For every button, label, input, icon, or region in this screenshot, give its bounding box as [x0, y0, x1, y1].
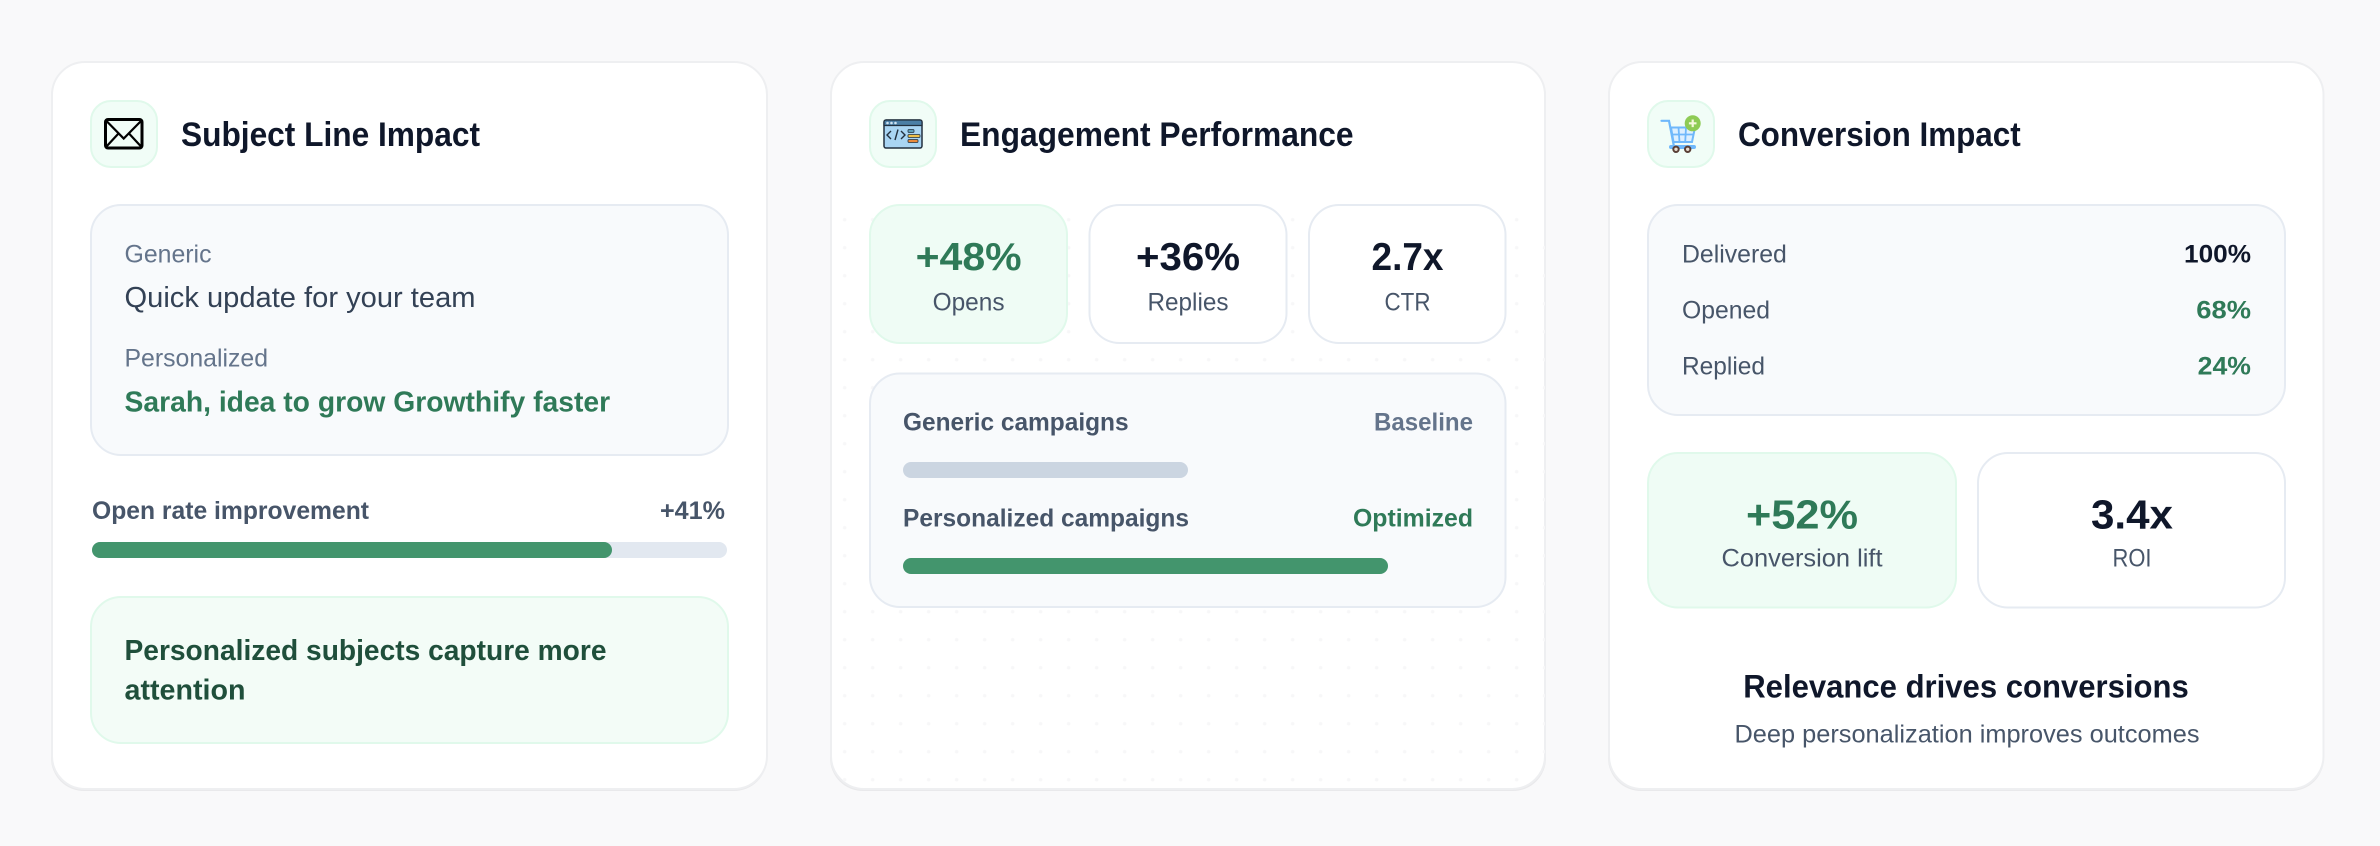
chart: campaign comparison — [870, 374, 1506, 607]
stat: replies — [1090, 205, 1286, 343]
panel: Engagement Performance — [830, 62, 1546, 791]
row: delivered — [1682, 241, 2251, 269]
panel: funnel metrics — [1648, 205, 2285, 415]
stat: opens: Opens — [933, 289, 1005, 317]
stat: opens — [870, 205, 1067, 343]
stat: replies: +36% — [1136, 236, 1240, 279]
bar: personalized — [903, 558, 1388, 574]
heading: Engagement Performance: Engagement Performance — [960, 116, 1354, 154]
callout: personalized subjects — [91, 597, 728, 743]
icon: shopping cart — [1648, 101, 1714, 167]
chart: open rate improvement — [92, 497, 727, 558]
stat: opens: +48% — [916, 236, 1022, 279]
row: opened: 68% — [2196, 297, 2251, 325]
stat: replies: Replies — [1148, 289, 1228, 317]
callout: personalized subjects: attention — [124, 674, 246, 706]
stat: conversion lift: +52% — [1746, 491, 1858, 537]
stat: ctr: 2.7x — [1372, 236, 1444, 279]
stat: ctr — [1309, 205, 1506, 343]
label: personalized: Personalized — [124, 345, 268, 373]
text: personalized subject: Sarah, idea to grow Growthify faster — [124, 387, 610, 419]
row: opened — [1682, 297, 2251, 325]
icon: envelope — [91, 101, 157, 167]
row: delivered: 100% — [2184, 241, 2251, 269]
label: baseline: Baseline — [1374, 409, 1473, 437]
bar: generic — [903, 462, 1188, 478]
callout: personalized subjects: Personalized subjects capture more — [124, 635, 606, 667]
row: delivered: Delivered — [1682, 241, 1787, 269]
label: personalized campaigns: Personalized campaigns — [903, 505, 1189, 533]
value: +41%: +41% — [660, 497, 725, 525]
icon: code window — [870, 101, 936, 167]
row: replied: 24% — [2198, 352, 2251, 380]
stat: ctr: CTR — [1384, 289, 1430, 317]
heading: Subject Line Impact: Subject Line Impact — [181, 116, 480, 154]
row: replied — [1682, 352, 2251, 380]
stat: roi: ROI — [2112, 545, 2152, 573]
stat: conversion lift: Conversion lift — [1722, 545, 1882, 573]
stat: roi — [1978, 453, 2285, 608]
stat: roi: 3.4x — [2091, 491, 2173, 537]
row: opened: Opened — [1682, 297, 1770, 325]
panel: subject line comparison — [91, 205, 728, 455]
text: relevance drives conversions: Relevance drives conversions — [1743, 668, 2189, 704]
stat: conversion lift — [1648, 453, 1956, 608]
label: generic campaigns: Generic campaigns — [903, 409, 1129, 437]
row: replied: Replied — [1682, 352, 1765, 380]
panel: Conversion Impact — [1608, 62, 2324, 791]
heading: Conversion Impact: Conversion Impact — [1738, 116, 2021, 154]
label: generic: Generic — [124, 241, 212, 269]
label: optimized: Optimized — [1353, 505, 1473, 533]
panel: Subject Line Impact — [51, 62, 767, 791]
label: open rate improvement: Open rate improvement — [92, 497, 370, 525]
bar: fill — [92, 542, 612, 558]
text: generic subject: Quick update for your team — [124, 282, 476, 314]
text: deep personalization: Deep personalization improves outcomes — [1734, 721, 2200, 749]
